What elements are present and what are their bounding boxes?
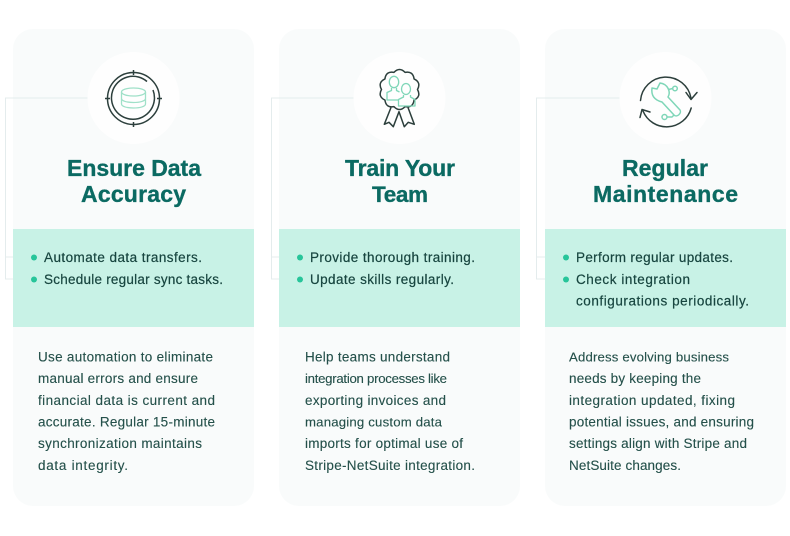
body text: data accuracy: manual errors and ensure — [38, 371, 198, 386]
bullet list: data accuracy — [31, 250, 223, 287]
body text: data accuracy: data integrity. — [38, 458, 128, 473]
body text: team training: Stripe-NetSuite integration. — [305, 458, 475, 473]
body text: data accuracy — [38, 350, 215, 473]
icon: database target — [88, 52, 180, 144]
body text: data accuracy: accurate. Regular 15-minute — [38, 414, 215, 430]
title: regular maintenance: Regular — [622, 155, 708, 181]
body text: maintenance: potential issues, and ensuring — [569, 414, 754, 430]
bullet list: data accuracy: Automate data transfers. — [44, 250, 202, 265]
body text: data accuracy: synchronization maintains — [38, 436, 202, 451]
body text: maintenance: settings align with Stripe and — [569, 436, 747, 451]
body text: data accuracy: financial data is current and — [38, 393, 215, 408]
bullet list: team training: Provide thorough training. — [310, 250, 475, 265]
title: ensure data accuracy: Accuracy — [81, 181, 186, 207]
body text: maintenance — [569, 350, 754, 473]
body text: team training — [305, 350, 475, 473]
body text: team training: integration processes like — [305, 371, 447, 386]
panel: train your team — [272, 29, 520, 506]
bullet list: data accuracy: Schedule regular sync tasks. — [44, 272, 223, 287]
title: train your team: Team — [372, 182, 428, 207]
bullet list: team training — [297, 250, 475, 287]
title: ensure data accuracy — [67, 155, 201, 207]
body text: team training: exporting invoices and — [305, 393, 446, 408]
body text: team training: imports for optimal use of — [305, 436, 463, 451]
title: train your team — [345, 155, 455, 207]
title: ensure data accuracy: Ensure Data — [67, 155, 201, 181]
title: regular maintenance — [593, 155, 738, 207]
icon: wrench with cycle arrows — [620, 52, 712, 144]
body text: data accuracy: Use automation to eliminate — [38, 350, 213, 364]
panel: ensure data accuracy — [6, 29, 254, 506]
body text: maintenance: Address evolving business — [569, 350, 729, 364]
bullet list: team training: Update skills regularly. — [310, 272, 454, 287]
title: regular maintenance: Maintenance — [593, 181, 738, 207]
panel: regular maintenance — [536, 29, 786, 506]
bullet list: maintenance: Check integration — [576, 272, 690, 287]
bullet list: maintenance: configurations periodically. — [576, 294, 749, 308]
title: train your team: Train Your — [345, 155, 455, 181]
bullet list: maintenance — [563, 250, 749, 308]
body text: team training: managing custom data — [305, 414, 443, 430]
body text: maintenance: NetSuite changes. — [569, 458, 681, 473]
icon: team award badge — [354, 52, 446, 144]
body text: team training: Help teams understand — [305, 350, 450, 364]
bullet list: maintenance: Perform regular updates. — [576, 250, 733, 265]
body text: maintenance: needs by keeping the — [569, 371, 701, 386]
body text: maintenance: integration updated, fixing — [569, 393, 735, 408]
